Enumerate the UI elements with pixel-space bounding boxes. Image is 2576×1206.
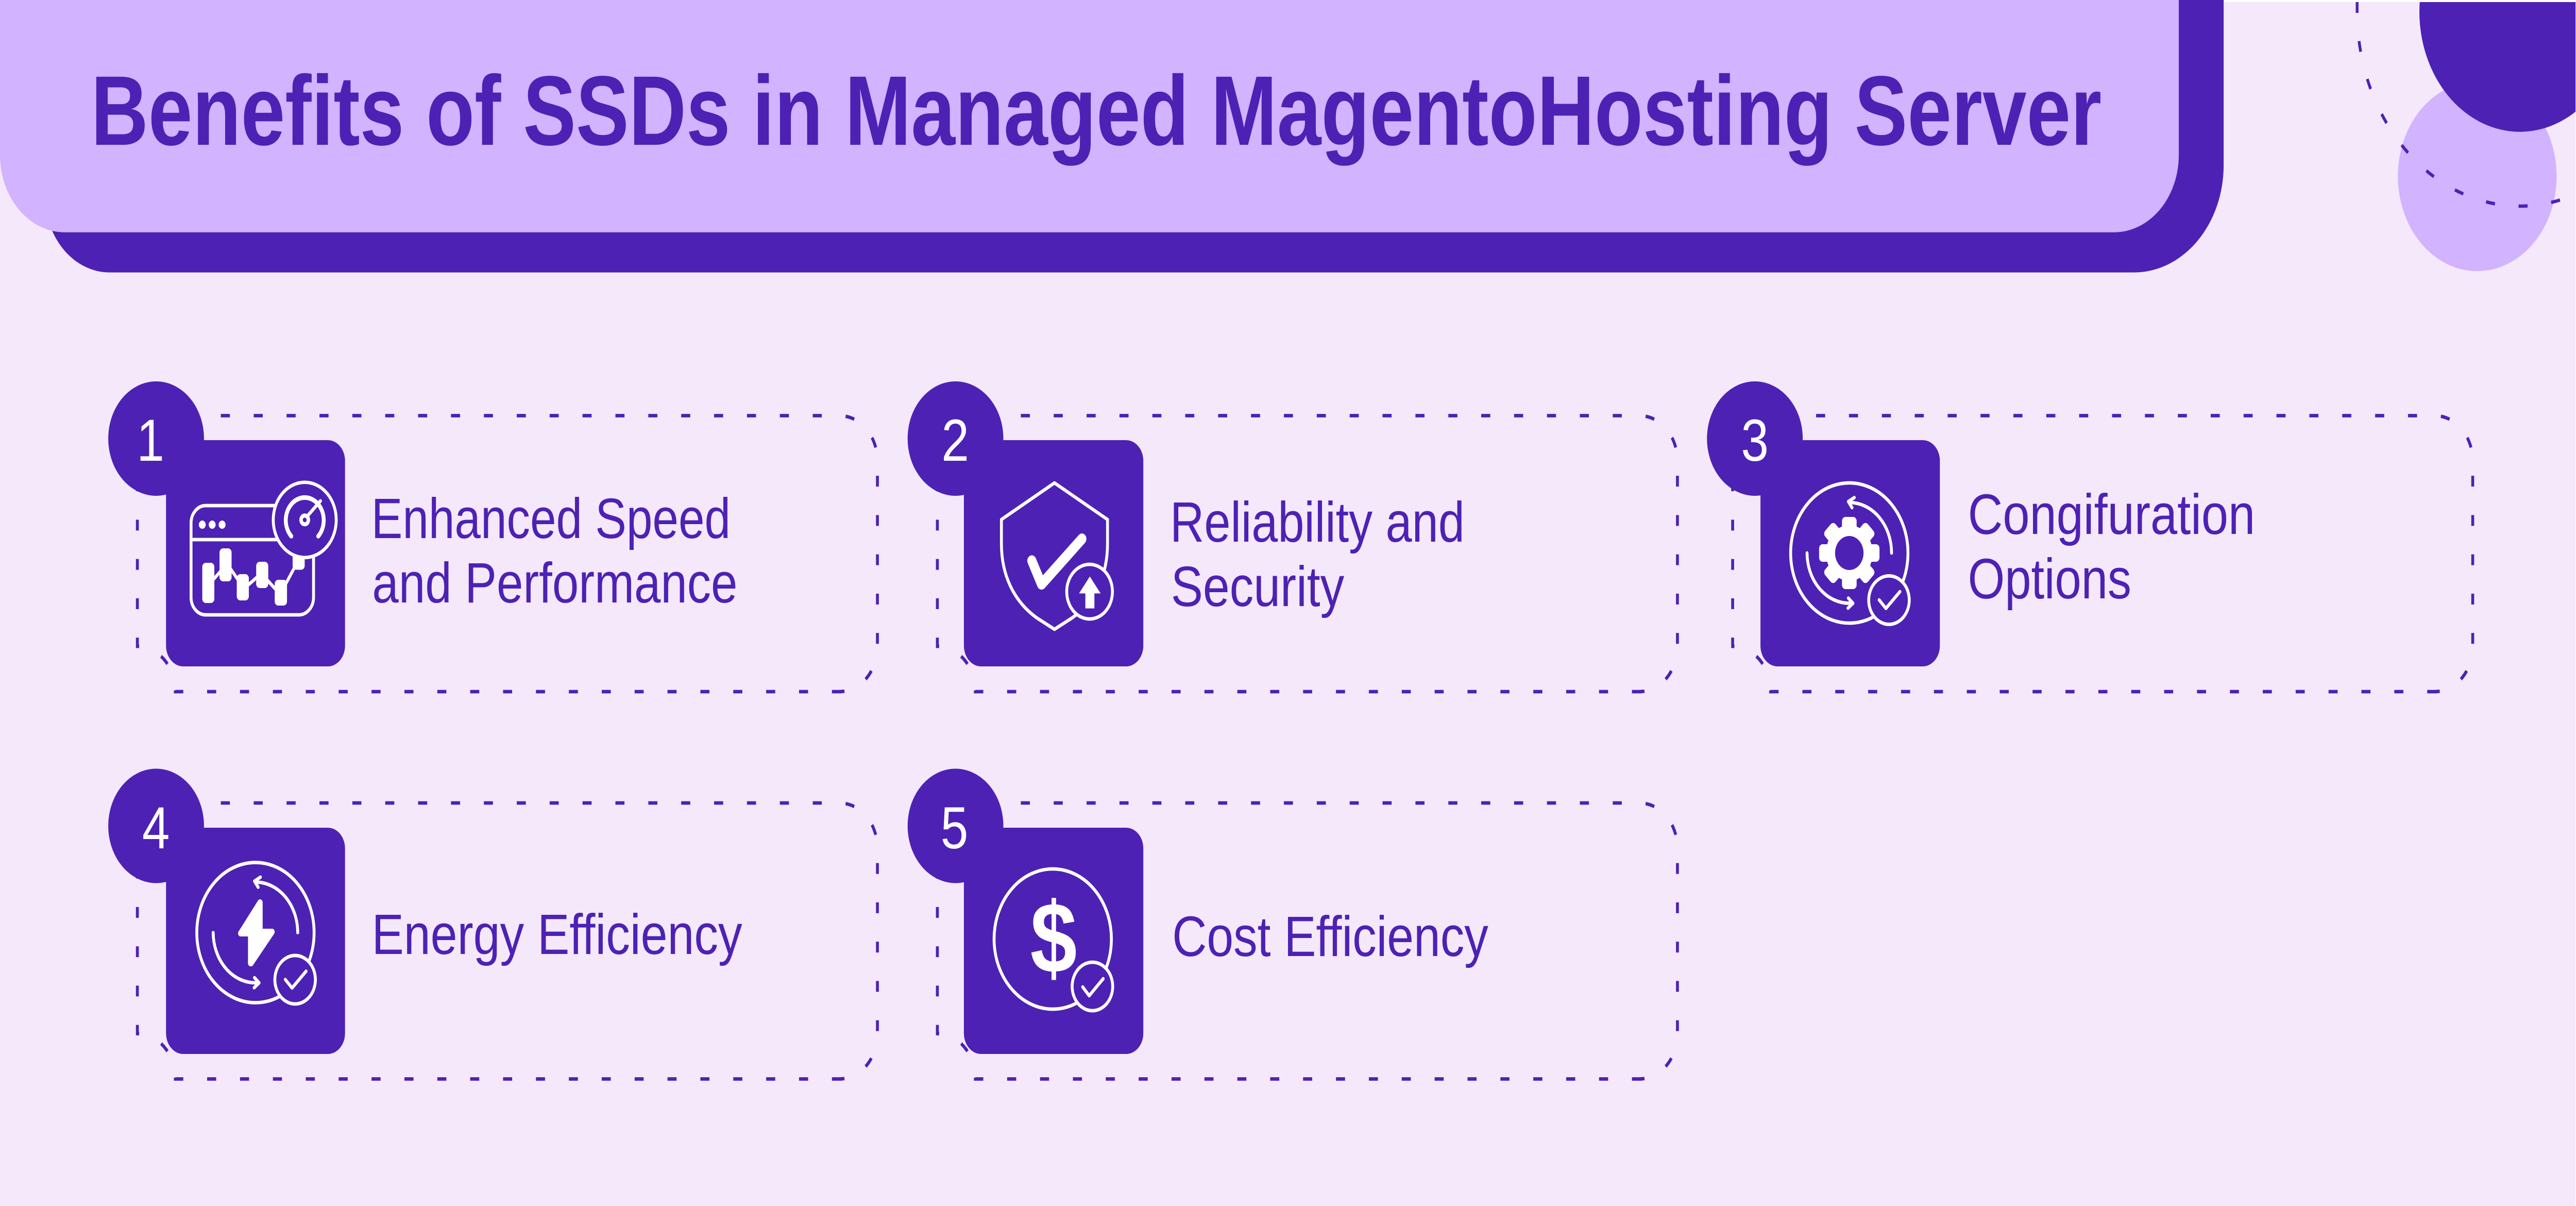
dashed outline: [138, 415, 877, 692]
icon: lightning bolt with cycle arrows and check: [197, 863, 315, 1004]
panel: card 2 Reliability and Security: [908, 381, 1677, 692]
icon tile: [964, 440, 1143, 666]
label: [371, 487, 737, 615]
number badge 3: 3: [1741, 408, 1769, 474]
title: Benefits of SSDs in Managed MagentoHosting Server: [91, 55, 2102, 166]
icon: shield with check and upload arrow: [1002, 483, 1112, 629]
icon tile: [166, 440, 345, 666]
number badge 5: [908, 769, 1004, 883]
icon: dollar coin with check: $: [1030, 882, 1077, 994]
label: Options: [1968, 547, 2131, 611]
icon: speed gauge over browser chart: [191, 482, 336, 615]
label: and Performance: [372, 551, 737, 615]
panel: card 3 Congifuration Options: [1707, 381, 2473, 692]
icon: gear with cycle arrows and check: [1791, 483, 1909, 624]
label: Cost Efficiency: [1172, 905, 1488, 968]
panel: card 4 Energy Efficiency: [108, 769, 877, 1079]
number badge 2: 2: [941, 408, 969, 474]
icon tile: [1760, 440, 1940, 666]
label: [1968, 483, 2255, 611]
label: Security: [1171, 555, 1344, 618]
panel: card 1 Enhanced Speed and Performance: [108, 381, 877, 692]
icon tile: [166, 828, 345, 1054]
number badge 4: 4: [142, 795, 170, 861]
dashed outline: [937, 415, 1677, 692]
dashed outline: [138, 803, 877, 1079]
icon: dollar coin with check: [994, 869, 1113, 1011]
panel: card 5 Cost Efficiency: [908, 769, 1677, 1079]
number badge 4: [108, 769, 204, 883]
label: [1170, 491, 1465, 618]
dashed outline: [1733, 415, 2473, 692]
header banner: [0, 0, 2224, 273]
label: Energy Efficiency: [372, 903, 742, 966]
dashed outline: [937, 803, 1677, 1079]
label: Congifuration: [1968, 483, 2255, 546]
icon tile: [964, 828, 1143, 1054]
label: Enhanced Speed: [371, 487, 731, 550]
number badge 2: [908, 381, 1004, 496]
number badge 1: 1: [137, 408, 164, 474]
decoration: top-right circles and dashed arc: [2224, 0, 2576, 1206]
number badge 3: [1707, 381, 1803, 496]
label: Reliability and: [1170, 491, 1465, 554]
number badge 5: 5: [941, 795, 968, 861]
number badge 1: [108, 381, 204, 496]
